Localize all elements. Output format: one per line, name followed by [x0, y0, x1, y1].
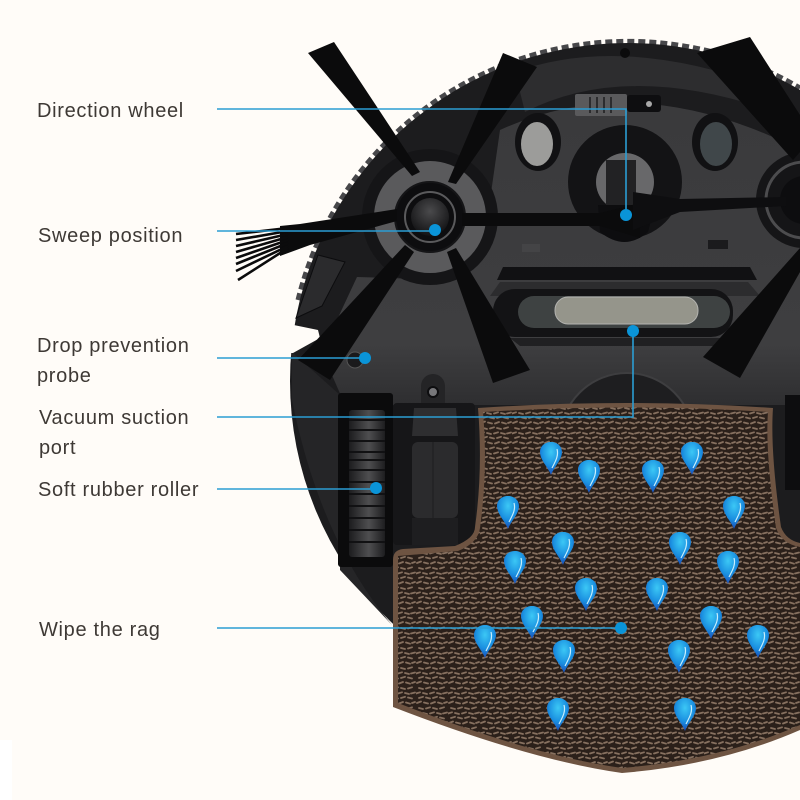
right wheel slot: [785, 395, 800, 490]
scalloped body rim: [298, 41, 800, 300]
right brush hub: [756, 152, 800, 248]
probe: [347, 352, 363, 368]
top curved band: [515, 56, 780, 112]
vacuum suction port: [493, 289, 745, 346]
dark trapezoid bracket lines: [497, 267, 757, 280]
callout: vacuum suction port: Vacuum suction: [39, 407, 189, 429]
callout: direction wheel: [37, 100, 632, 221]
slider switch: [575, 94, 661, 116]
callout: drop prevention probe: [37, 335, 371, 387]
soft rubber roller: [338, 393, 393, 567]
right brush bristles: [633, 37, 800, 378]
callout: vacuum suction port: port: [39, 437, 76, 459]
left brush hub: [362, 149, 498, 285]
callout: soft rubber roller: [38, 479, 382, 501]
callout: vacuum suction port: [39, 325, 639, 459]
callout: wipe the rag: [39, 619, 627, 641]
body: [290, 43, 800, 719]
lower left body shell: [292, 352, 392, 625]
left sensor oval: [515, 113, 561, 171]
left brush bristles: [236, 42, 640, 383]
callout: soft rubber roller: Soft rubber roller: [38, 479, 199, 501]
side bumper: [296, 255, 345, 318]
sensor hole: [620, 48, 630, 58]
robot vacuum underside: [236, 37, 800, 625]
callout: sweep position: Sweep position: [38, 225, 183, 247]
rag edge: [393, 403, 800, 773]
right sensor oval: [692, 113, 738, 171]
water drops: [474, 442, 769, 731]
callout: sweep position: [38, 224, 441, 247]
callout: wipe the rag: Wipe the rag: [39, 619, 161, 641]
side notch: [284, 323, 320, 353]
gray chassis plate: [332, 94, 800, 405]
callout: direction wheel: Direction wheel: [37, 100, 184, 122]
callout: drop prevention probe: probe: [37, 365, 92, 387]
wheel housing: [393, 374, 475, 545]
small chassis marks: [708, 240, 728, 249]
lower round cover: [570, 374, 684, 404]
wipe rag mop pad: [393, 403, 800, 773]
callout: drop prevention probe: Drop prevention: [37, 335, 190, 357]
rag pile: [398, 408, 800, 768]
direction wheel well: [568, 125, 682, 242]
background corner: [0, 740, 12, 800]
